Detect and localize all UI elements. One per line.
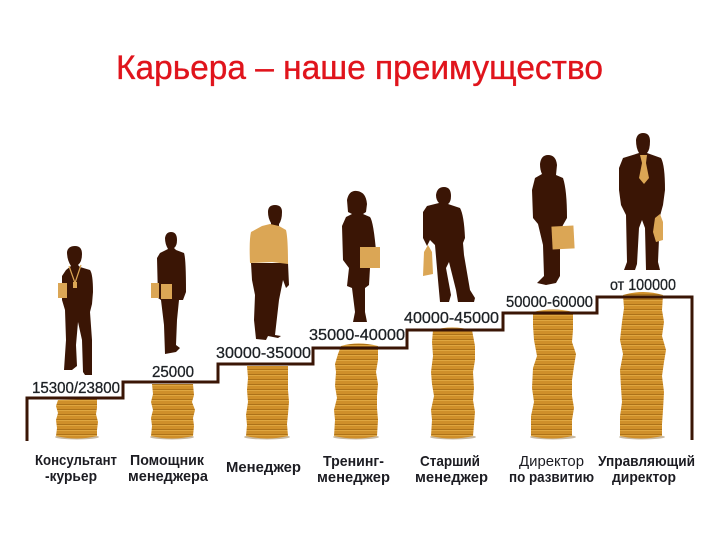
manager: Менеджер (226, 459, 301, 476)
managing director (598, 453, 695, 486)
figure 6: development director (532, 155, 575, 285)
coin stack 4 (333, 344, 379, 440)
training manager: Тренинг- (323, 453, 384, 470)
silhouette (619, 133, 665, 270)
coin stack 7 (619, 292, 666, 440)
silhouette (532, 155, 567, 285)
salary 2: 25000 (152, 364, 194, 381)
title: Карьера – наше преимущество (116, 49, 603, 87)
development director: по развитию (509, 469, 594, 486)
senior manager: менеджер (415, 469, 488, 486)
training manager (317, 453, 390, 486)
consultant courier (35, 452, 117, 485)
salary 1: 15300/23800 (32, 380, 120, 397)
head (268, 205, 282, 227)
shirt (250, 224, 288, 264)
folder (58, 283, 67, 298)
training manager: менеджер (317, 469, 390, 486)
senior manager: Старший (420, 453, 480, 470)
salary 4: 35000-40000 (309, 327, 405, 344)
consultant courier: -курьер (45, 468, 97, 485)
figure 2: assistant manager (151, 232, 186, 354)
salary 7: от 100000 (610, 277, 676, 294)
figure 3: manager (250, 205, 289, 340)
job title labels (35, 452, 695, 486)
consultant courier: Консультант (35, 452, 117, 469)
salary 5: 40000-45000 (404, 310, 499, 327)
coin stack 5 (430, 328, 476, 440)
briefcase (551, 225, 575, 250)
figure 1: courier consultant (58, 246, 93, 375)
managing director: Управляющий (598, 453, 695, 470)
assistant manager: Помощник (130, 452, 204, 469)
folder (360, 247, 380, 268)
figure 7: managing director (619, 133, 665, 270)
silhouette (342, 191, 377, 322)
assistant manager: менеджера (128, 468, 209, 485)
trousers and arms (251, 263, 289, 340)
stepped career line (27, 297, 692, 441)
salary 3: 30000-35000 (216, 345, 311, 362)
salary labels (32, 277, 676, 397)
managing director: директор (612, 469, 676, 486)
bag (653, 214, 663, 242)
figure 4: training manager (342, 191, 380, 322)
tie (639, 155, 649, 184)
folders (151, 283, 159, 298)
development director (509, 453, 594, 486)
assistant manager (128, 452, 209, 485)
silhouette (423, 187, 475, 302)
coin stacks (55, 292, 666, 440)
silhouette (62, 246, 93, 375)
development director: Директор (519, 453, 584, 470)
coin stack 2 (150, 384, 195, 440)
bag (423, 245, 433, 276)
coin stack 6 (530, 310, 576, 440)
badge lanyard (69, 265, 81, 283)
coin stack 1 (55, 399, 99, 440)
silhouette (157, 232, 186, 354)
figure 5: senior manager (423, 187, 475, 302)
salary 6: 50000-60000 (506, 294, 593, 311)
senior manager (415, 453, 488, 486)
coin stack 3 (244, 366, 290, 440)
